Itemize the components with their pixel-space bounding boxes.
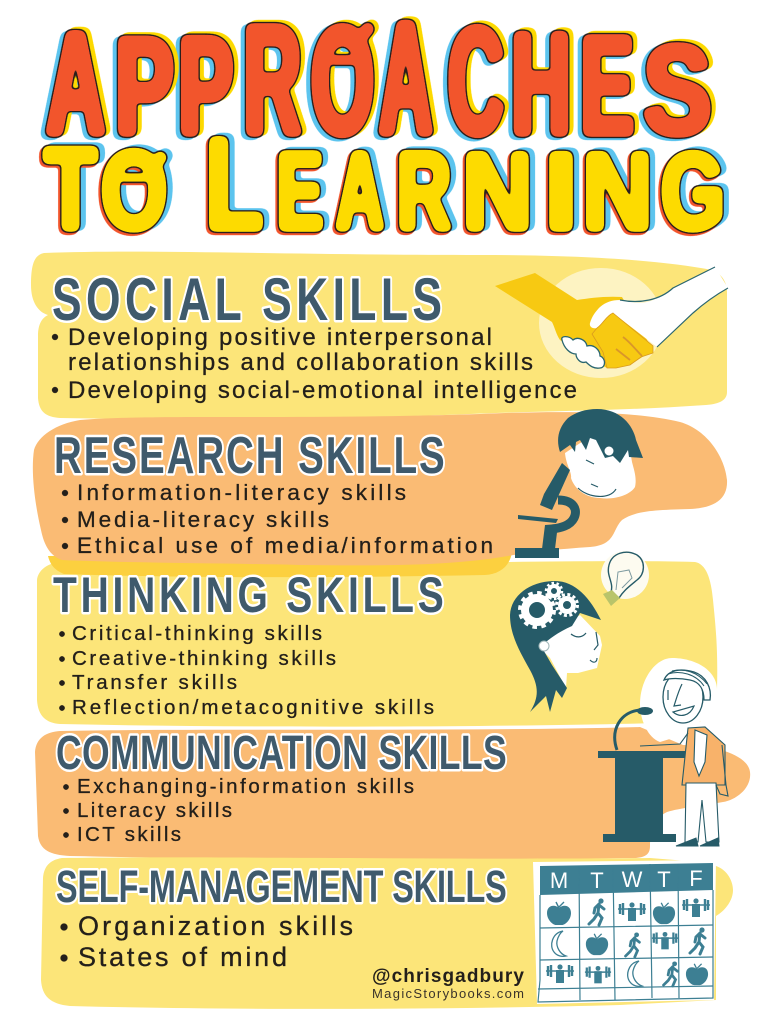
bullet list: Transfer skills — [72, 671, 237, 694]
heading: SELF-MANAGEMENT SKILLS — [56, 863, 507, 912]
title line: To Learning: A — [336, 131, 384, 253]
title line: To Learning: I — [544, 129, 578, 252]
title line: Approaches: C — [448, 0, 504, 167]
bullet list: relationships and collaboration skills — [68, 349, 533, 376]
title line: To Learning: R — [397, 130, 451, 252]
panel: research skills — [33, 409, 727, 565]
title line: To Learning: G — [661, 129, 725, 253]
panel: communication skills — [35, 658, 750, 859]
bullet list: Media-literacy skills — [77, 507, 329, 532]
weekday labels: F — [689, 866, 703, 891]
bullet list: Ethical use of media/information — [77, 533, 493, 558]
bullet list — [59, 622, 434, 719]
panel background — [37, 561, 717, 727]
weekday labels: T — [657, 867, 671, 892]
title line: To Learning — [44, 112, 725, 258]
bullet list — [62, 480, 493, 558]
heading: COMMUNICATION SKILLS — [56, 726, 507, 779]
icon: boy with microscope — [515, 409, 643, 558]
bullet list: Critical-thinking skills — [72, 622, 322, 645]
heading: RESEARCH SKILLS — [54, 426, 445, 484]
icon: light bulb — [601, 551, 649, 606]
calendar sheet — [533, 860, 716, 1004]
title line: To Learning: N — [582, 129, 652, 252]
weekday labels: M — [550, 868, 568, 893]
title line: Approaches: H — [511, 2, 571, 166]
icon: speaker at podium — [598, 658, 728, 846]
panel background — [31, 252, 727, 419]
credits: MagicStorybooks.com — [372, 986, 524, 1001]
bullet list: ICT skills — [77, 823, 181, 846]
panel background — [33, 412, 727, 565]
bullet list: Developing positive interpersonal — [68, 324, 492, 351]
darker overlap strip — [48, 552, 512, 577]
panel: thinking skills — [37, 552, 717, 727]
panel background — [35, 727, 750, 859]
bullet list — [60, 911, 353, 972]
weekday labels — [550, 866, 703, 893]
title line: To Learning: T — [44, 123, 97, 254]
bullet list — [63, 775, 414, 846]
bullet list: Creative-thinking skills — [72, 647, 336, 670]
bullet list — [52, 324, 577, 404]
credits: @chrisgadbury — [372, 966, 524, 987]
title — [44, 0, 725, 258]
title line: Approaches: E — [580, 7, 634, 165]
heading: THINKING SKILLS — [53, 566, 444, 623]
bullet list: Reflection/metacognitive skills — [72, 696, 434, 719]
bullet list: States of mind — [78, 942, 287, 972]
weekday labels: W — [622, 867, 643, 892]
title line: Approaches: A — [46, 2, 105, 166]
heading: SOCIAL SKILLS — [52, 267, 442, 334]
bullet list: Exchanging-information skills — [77, 775, 414, 798]
calendar — [533, 860, 716, 1004]
bullet list: Literacy skills — [77, 799, 232, 822]
bullet list: Organization skills — [78, 911, 353, 941]
weekday labels: T — [590, 868, 604, 893]
title line: To Learning: E — [277, 131, 323, 253]
panel: social skills — [31, 252, 728, 419]
title line: Approaches: P — [115, 9, 174, 164]
panel background — [41, 857, 733, 1009]
title line: Approaches: S — [643, 19, 712, 161]
panel: self-management skills — [41, 857, 733, 1009]
title line: Approaches — [46, 0, 712, 169]
title line: Approaches: P — [178, 8, 233, 165]
credits — [372, 966, 524, 1001]
schedule icons — [546, 898, 710, 986]
bullet list: Developing social-emotional intelligence — [68, 377, 577, 404]
title line: To Learning: L — [206, 112, 263, 258]
calendar grid — [538, 864, 713, 1002]
calendar header — [540, 863, 713, 895]
icon: handshake — [495, 267, 728, 378]
icon: girl with gears — [510, 581, 602, 712]
title line: Approaches: O — [311, 0, 374, 168]
title line: To Learning: N — [462, 129, 532, 252]
title line: To Learning: O — [101, 129, 167, 254]
bullet list: Information-literacy skills — [77, 480, 406, 505]
